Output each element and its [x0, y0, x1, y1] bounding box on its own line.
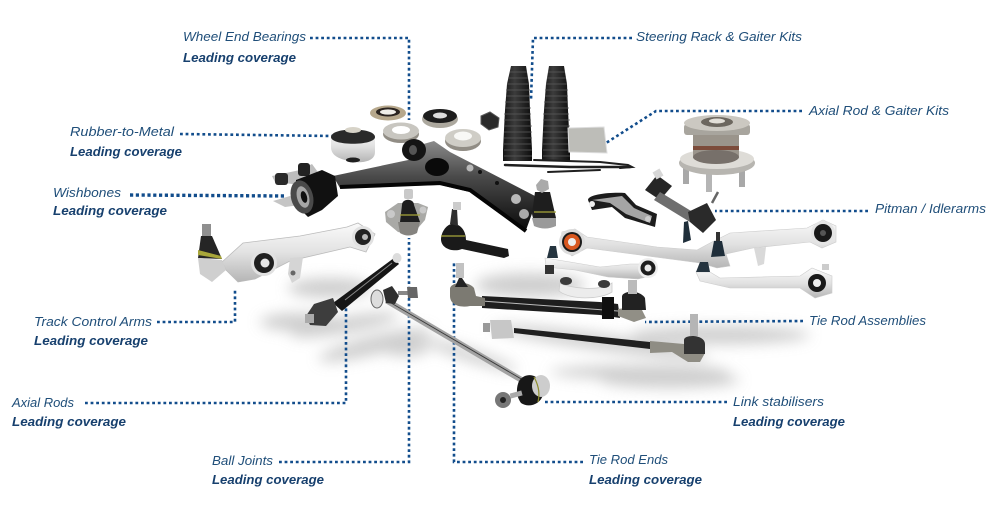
label: Ball Joints: Ball Joints	[212, 453, 274, 468]
leader line: Axial Rods	[85, 305, 346, 403]
label: Steering Rack and Gaiter Kits: Steering Rack & Gaiter Kits	[636, 29, 803, 44]
label: Ball Joints	[212, 453, 324, 487]
leader line: Ball Joints	[279, 238, 409, 462]
label: Link stabilisers	[733, 394, 845, 429]
leader line: Tie Rod Ends	[454, 262, 583, 462]
leader line: Pitman and Idlerarms	[715, 210, 868, 212]
part: wheel hub	[679, 115, 755, 192]
label: Wheel End Bearings: Wheel End Bearings	[183, 29, 307, 44]
label: Wishbones	[53, 185, 167, 218]
front bush	[296, 170, 338, 217]
label: Pitman and Idlerarms: Pitman / Idlerarms	[875, 201, 987, 216]
part: tie rod assembly lower	[483, 314, 705, 362]
part: track control arm	[198, 223, 375, 283]
floor shadows	[260, 273, 810, 388]
leader line: Wheel End Bearings	[310, 38, 409, 120]
label: Wishbones: Leading coverage	[53, 203, 167, 218]
label: Wheel End Bearings: Leading coverage	[183, 50, 296, 65]
part: small right control arm	[545, 246, 658, 279]
leader line: Rubber-to-Metal	[180, 134, 332, 136]
leader line: Wishbones	[130, 195, 285, 196]
part: pitman arm and idler arm	[588, 169, 718, 233]
label: Rubber-to-Metal: Leading coverage	[70, 144, 182, 159]
part: steering tie rod end	[441, 202, 509, 258]
label: Wishbones: Wishbones	[53, 185, 122, 200]
label: Rubber-to-Metal	[70, 124, 182, 159]
leader line: Tie Rod Assemblies	[645, 321, 803, 322]
leader line: Link stabilisers	[545, 401, 727, 403]
label: Tie Rod Assemblies: Tie Rod Assemblies	[809, 313, 926, 328]
label: Axial Rods: Axial Rods	[11, 395, 74, 410]
part: axial rod	[305, 253, 402, 326]
part: large right control arm	[559, 220, 836, 268]
ball joint	[532, 192, 556, 226]
label: Wheel End Bearings	[183, 29, 307, 65]
part: main wishbone	[272, 139, 556, 231]
part: small link arm	[559, 277, 612, 298]
leader line: Steering Rack and Gaiter Kits	[531, 38, 632, 100]
top rear bush	[402, 139, 426, 161]
label: Axial Rod and Gaiter Kits: Axial Rod & Gaiter Kits	[808, 103, 950, 118]
label: Axial Rods: Leading coverage	[12, 414, 126, 429]
label: Link stabilisers: Link stabilisers	[733, 394, 825, 409]
label: Axial Rods	[11, 395, 126, 429]
part: cable ties	[505, 160, 632, 172]
part: lower right control arm	[696, 262, 832, 298]
part: rubber-to-metal bush	[331, 127, 375, 162]
label: Rubber-to-Metal: Rubber-to-Metal	[70, 124, 175, 139]
part: hex nut	[481, 112, 499, 130]
part: grease sachet	[568, 127, 607, 153]
label: Track Control Arms	[34, 314, 153, 348]
wishbone plate	[333, 141, 535, 230]
label: Ball Joints: Leading coverage	[212, 472, 324, 487]
label: Tie Rod Ends	[589, 452, 702, 487]
leader line: Track Control Arms	[157, 288, 235, 322]
part: wheel bearings and seals	[370, 106, 481, 151]
label: Link stabilisers: Leading coverage	[733, 414, 845, 429]
part: ball joint	[385, 189, 428, 236]
side bracket plates	[272, 164, 320, 186]
part: steering rack gaiters	[503, 66, 570, 161]
label: Track Control Arms: Leading coverage	[34, 333, 148, 348]
label: Track Control Arms: Track Control Arms	[34, 314, 153, 329]
leader line: Axial Rod and Gaiter Kits	[606, 111, 802, 143]
label: Tie Rod Ends: Leading coverage	[589, 472, 702, 487]
part: link stabiliser	[371, 286, 550, 408]
label: Tie Rod Ends: Tie Rod Ends	[589, 452, 668, 467]
fixing bolts	[511, 194, 521, 204]
part: tie rod assembly upper	[450, 263, 646, 322]
